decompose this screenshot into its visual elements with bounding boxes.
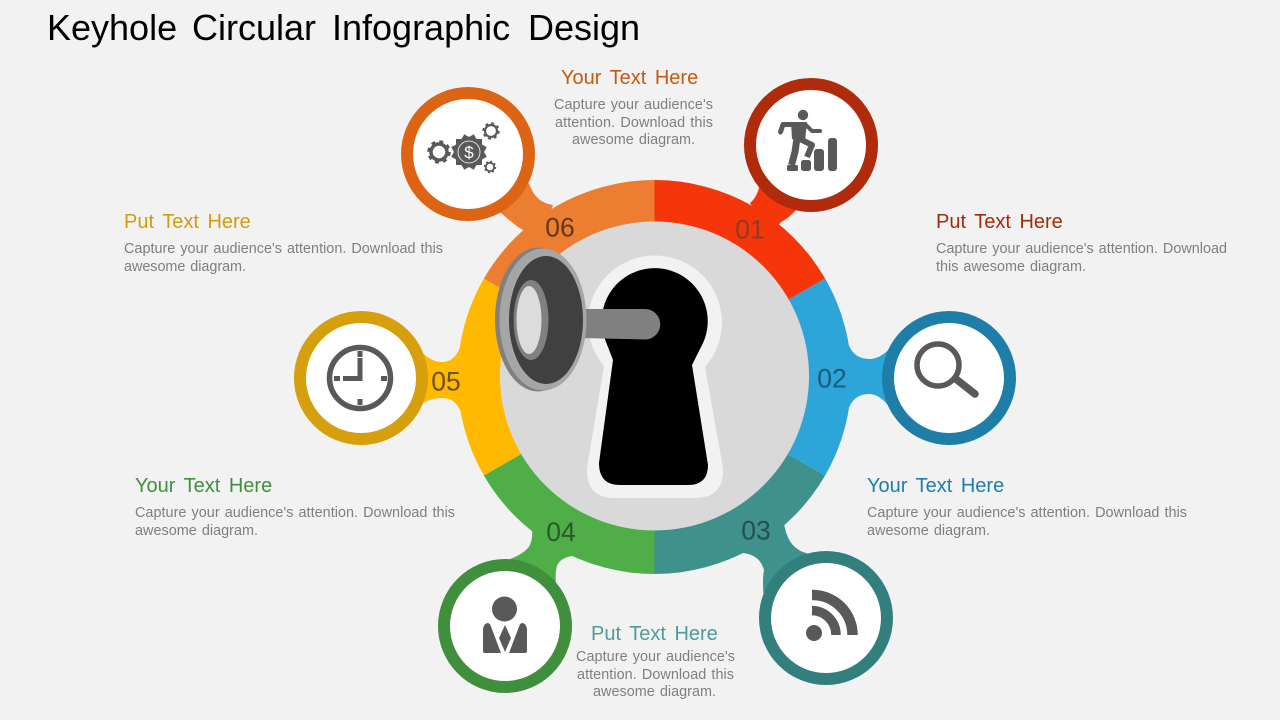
- text block: upper left: awesome diagram.: [124, 259, 246, 275]
- segment numbers: 01: [735, 214, 765, 244]
- text block: lower left: Capture your audience's attention. Download this: [135, 505, 455, 521]
- text block: bottom: Put Text Here: [591, 623, 718, 645]
- segment numbers: 05: [431, 366, 461, 396]
- title: Keyhole: [47, 7, 177, 48]
- central disc: [500, 222, 809, 530]
- segment 04 with connector: [484, 377, 654, 585]
- text block: lower left: Your Text Here: [135, 475, 272, 497]
- segment numbers: 02: [817, 364, 847, 394]
- keyhole: [587, 255, 723, 498]
- key: [495, 248, 660, 392]
- icon: magnifying glass: [917, 344, 975, 394]
- segment numbers: 06: [545, 212, 575, 242]
- title: Design: [528, 7, 640, 48]
- text block: lower left: awesome diagram.: [135, 523, 258, 539]
- text block: bottom: awesome diagram.: [593, 684, 716, 700]
- badge 06: [401, 87, 535, 221]
- icon: clock: [330, 348, 390, 408]
- badge 01: [744, 78, 878, 212]
- text block: bottom: [576, 623, 735, 700]
- segment 06 with connector: [484, 180, 654, 377]
- text block: top: Capture your audience's: [554, 97, 713, 113]
- icon: businessman: [483, 596, 527, 653]
- text block: lower right: Your Text Here: [867, 475, 1004, 497]
- segment numbers: 04: [546, 517, 576, 547]
- text block: top: awesome diagram.: [572, 132, 695, 148]
- segment 05 with connector: [420, 278, 654, 476]
- text block: lower left: [135, 475, 455, 539]
- circular diagram: [294, 78, 1016, 693]
- text block: upper right: Put Text Here: [936, 211, 1063, 233]
- text block: top: [554, 67, 713, 148]
- badge 02: [882, 311, 1016, 445]
- text block: upper right: [936, 211, 1227, 275]
- text block: upper right: Capture your audience's attention. Download: [936, 241, 1227, 257]
- title: Circular: [192, 7, 316, 48]
- text block: lower right: awesome diagram.: [867, 523, 990, 539]
- text block: lower right: Capture your audience's attention. Download this: [867, 505, 1187, 521]
- text block: bottom: attention. Download this: [577, 667, 734, 683]
- text block: bottom: Capture your audience's: [576, 649, 735, 665]
- badge 04: [438, 559, 572, 693]
- text block: upper left: Capture your audience's attention. Download this: [124, 241, 443, 257]
- segment numbers: [431, 212, 847, 547]
- segment 02 with connector: [654, 278, 890, 476]
- text block: upper right: this awesome diagram.: [936, 259, 1086, 275]
- text block: top: attention. Download this: [555, 115, 713, 131]
- icon: man climbing bars: [780, 110, 837, 171]
- segment numbers: 03: [741, 516, 771, 546]
- icon: rss feed: [806, 595, 852, 641]
- icon: gears with dollar sign: $: [464, 143, 474, 162]
- badge 05: [294, 311, 428, 445]
- title: Infographic: [332, 7, 510, 48]
- segment 03 with connector: [654, 377, 825, 600]
- text block: lower right: [867, 475, 1187, 539]
- text block: top: Your Text Here: [561, 67, 698, 89]
- text block: upper left: [124, 211, 443, 275]
- segment 01 with connector: [654, 180, 825, 377]
- text block: upper left: Put Text Here: [124, 211, 251, 233]
- badge 03: [759, 551, 893, 685]
